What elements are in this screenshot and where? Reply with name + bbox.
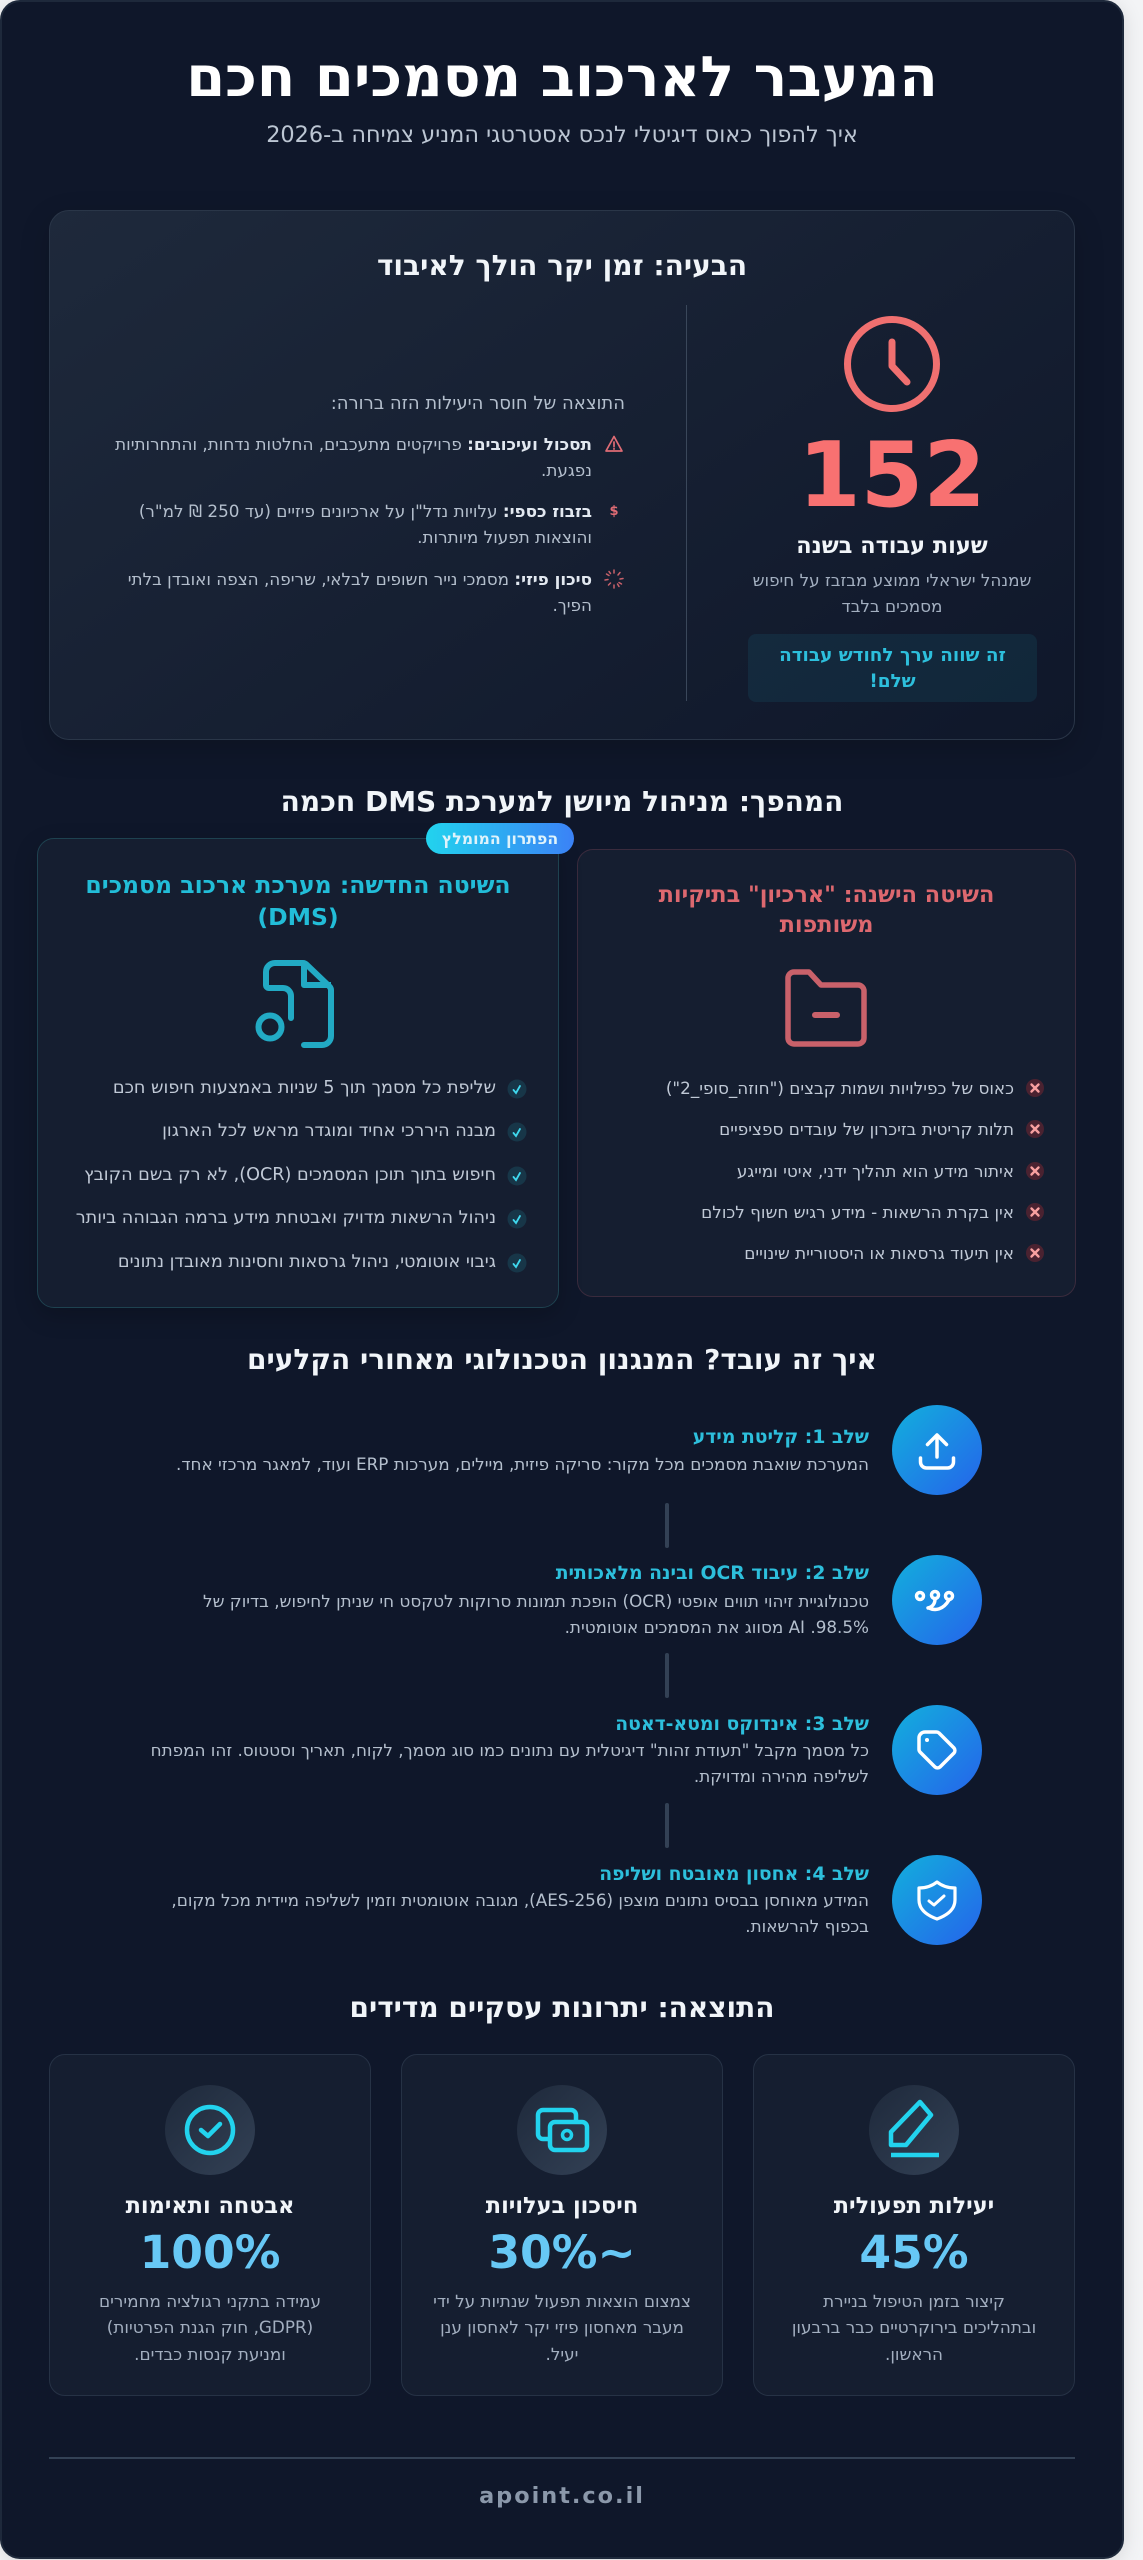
step 1 title: שלב 1: קליטת מידע (693, 1427, 869, 1448)
panel: new method (37, 838, 559, 1308)
item: frustration: תסכול ועיכובים: פרויקטים מתעכבים, החלטות נדחות, והתחרותיות (115, 434, 592, 454)
step 4 text: המידע מאוחסן בבסיס נתונים מוצפן (AES-256), מגובה אוטומטית וזמין לשליפה מיידית מכל מקום, (171, 1890, 869, 1910)
card text (792, 2291, 1036, 2364)
callout: שלם! (869, 671, 916, 692)
badge: recommended: הפתרון המומלץ (442, 829, 558, 848)
item 2: תלות קריטית בזיכרון של עובדים ספציפיים (719, 1119, 1014, 1139)
card value: 45% (859, 2226, 969, 2279)
step 2 text: 98.5%. AI מסווג את המסמכים אוטומטית. (565, 1617, 869, 1637)
card text (433, 2291, 691, 2364)
stat description: מסמכים בלבד (842, 596, 942, 616)
step 3 text (151, 1740, 869, 1786)
card title: אבטחה ותאימות (126, 2193, 294, 2219)
card: efficiency (753, 2054, 1075, 2396)
item: physical risk (128, 569, 592, 615)
old method title: משותפות (780, 912, 873, 938)
icon: folder (785, 969, 867, 1047)
step 4 text (171, 1890, 869, 1936)
card value: 100% (140, 2226, 280, 2279)
item 5: אין תיעוד גרסאות או היסטוריית שינויים (744, 1243, 1014, 1263)
panel: old method (577, 849, 1076, 1297)
card text: ומניעת קנסות כבדים. (134, 2344, 286, 2364)
card: savings (401, 2054, 723, 2396)
item 5: גיבוי אוטומטי, ניהול גרסאות וחסינות מאובדן נתונים (118, 1252, 496, 1272)
icon: tag (892, 1705, 982, 1795)
icon: dollar: $ (609, 504, 619, 519)
step 2 text: טכנולוגיית זיהוי תווים אופטי (OCR) הופכת תמונות סרוקות לטקסט חי שניתן לחיפוש, בדיוק של (203, 1591, 869, 1611)
subtitle: איך להפוך כאוס דיגיטלי לנכס אסטרטגי המניע צמיחה ב-2026 (266, 122, 858, 148)
card text (99, 2291, 321, 2364)
x marks (1026, 1079, 1044, 1262)
check marks (508, 1080, 526, 1272)
connector 1 (665, 1503, 669, 1548)
badge: recommended (426, 823, 574, 854)
new method title: (DMS) (257, 902, 339, 930)
icon: cash (517, 2085, 607, 2175)
divider (686, 305, 687, 701)
item: waste: בזבוז כספי: עלויות נדל"ן על ארכיונים פיזיים (עד 250 ₪ למ"ר) (139, 501, 592, 521)
icon: check circle (165, 2085, 255, 2175)
stat description: שמנהל ישראלי ממוצע מבזבז על חיפוש (753, 570, 1031, 590)
new method title (85, 871, 511, 930)
callout (748, 634, 1037, 702)
heading: results: התוצאה: יתרונות עסקיים מדידים (349, 1991, 775, 2024)
card text: (GDPR, חוק הגנת הפרטיות) (107, 2317, 313, 2337)
icon: pencil (869, 2085, 959, 2175)
icon: document (256, 960, 334, 1048)
card text: מעבר מאחסון פיזי יקר לאחסון ענן (440, 2317, 684, 2337)
connector 2 (665, 1653, 669, 1698)
icon: warning (605, 436, 623, 452)
item: physical risk: הפיך. (552, 595, 592, 615)
item: waste (139, 501, 592, 547)
icon: clock (844, 316, 940, 412)
stat description (753, 570, 1031, 616)
item 1: כאוס של כפילויות ושמות קבצים ("חוזה_סופי_2") (666, 1078, 1014, 1098)
item 4: ניהול הרשאות מדויק ואבטחת מידע ברמה הגבוהה ביותר (76, 1208, 496, 1228)
icon: burst (604, 569, 624, 589)
card text: הראשון. (885, 2344, 943, 2364)
item 3: חיפוש בתוך תוכן המסמכים (OCR), לא רק בשם הקובץ (84, 1165, 496, 1185)
card text: יעיל. (546, 2344, 578, 2364)
card text: עמידה בתקני רגולציה מחמירים (99, 2291, 321, 2311)
card title: חיסכון בעלויות (486, 2193, 638, 2219)
item 3: איתור מידע הוא תהליך ידני, איטי ומייגע (737, 1161, 1014, 1181)
card text: קיצור בזמן הטיפול בניירת (823, 2291, 1005, 2311)
new method title: השיטה החדשה: מערכת ארכוב מסמכים (85, 871, 511, 899)
icon: neural (892, 1555, 982, 1645)
item: waste: והוצאות תפעול מיותרות. (417, 527, 592, 547)
old method title (658, 882, 994, 938)
new method list (76, 1078, 526, 1272)
callout: זה שווה ערך לחודש עבודה (779, 645, 1006, 666)
footer rule (49, 2457, 1075, 2459)
stat: 152: 152 (798, 423, 986, 528)
item 1: שליפת כל מסמך תוך 5 שניות באמצעות חיפוש חכם (113, 1078, 496, 1098)
card: compliance (49, 2054, 371, 2396)
step 3 title: שלב 3: אינדוקס ומטא-דאטה (615, 1714, 869, 1735)
card text: צמצום הוצאות תפעול שנתיות על ידי (433, 2291, 691, 2311)
icon: upload (892, 1405, 982, 1495)
connector 3 (665, 1803, 669, 1848)
step 3 text: לשליפה מהירה ומדויקת. (694, 1766, 869, 1786)
card text: ובתהליכים בירוקרטיים כבר ברבעון (792, 2317, 1036, 2337)
heading: how it works: איך זה עובד? המנגנון הטכנולוגי מאחורי הקלעים (247, 1343, 877, 1376)
step 4 (171, 1855, 982, 1945)
icon: shield (892, 1855, 982, 1945)
step 1 (176, 1405, 982, 1495)
step 4 text: בכפוף להרשאות. (745, 1916, 869, 1936)
item 2: מבנה היררכי אחיד ומוגדר מראש לכל הארגון (162, 1121, 496, 1141)
item: frustration (115, 434, 592, 480)
old method list (666, 1078, 1044, 1263)
item: frustration: נפגעת. (541, 460, 592, 480)
step 4 title: שלב 4: אחסון מאובטח ושליפה (599, 1864, 869, 1885)
step 3 text: כל מסמך מקבל "תעודת זהות" דיגיטלית עם נתונים כמו סוג מסמך, לקוח, תאריך וסטטוס. זהו המפתח (151, 1740, 869, 1760)
step 3 (151, 1705, 982, 1795)
step 2 title: שלב 2: עיבוד OCR ובינה מלאכותית (556, 1563, 869, 1584)
intro text: התוצאה של חוסר היעילות הזה ברורה: (331, 393, 625, 414)
card value: ~30% (488, 2226, 636, 2279)
old method title: השיטה הישנה: "ארכיון" בתיקיות (659, 882, 994, 908)
panel: problem (49, 210, 1075, 740)
heading: problem: הבעיה: זמן יקר הולך לאיבוד (377, 249, 747, 282)
heading: revolution: המהפך: מניהול מיושן למערכת DMS חכמה (281, 785, 843, 818)
stat label: שעות עבודה בשנה (796, 533, 988, 559)
card title: יעילות תפעולית (834, 2193, 994, 2219)
step 2 text (203, 1591, 869, 1637)
title: המעבר לארכוב מסמכים חכם (186, 45, 938, 110)
footer: apoint.co.il (479, 2483, 645, 2509)
step 2 (203, 1555, 982, 1645)
step 1 text: המערכת שואבת מסמכים מכל מקור: סריקה פיזית, מיילים, מערכות ERP ועוד, למאגר מרכזי אחד. (176, 1454, 869, 1474)
item 4: אין בקרת הרשאות - מידע רגיש חשוף לכולם (701, 1202, 1014, 1222)
item: physical risk: סיכון פיזי: מסמכי נייר חשופים לבלאי, שריפה, הצפה ואובדן בלתי (128, 569, 592, 589)
